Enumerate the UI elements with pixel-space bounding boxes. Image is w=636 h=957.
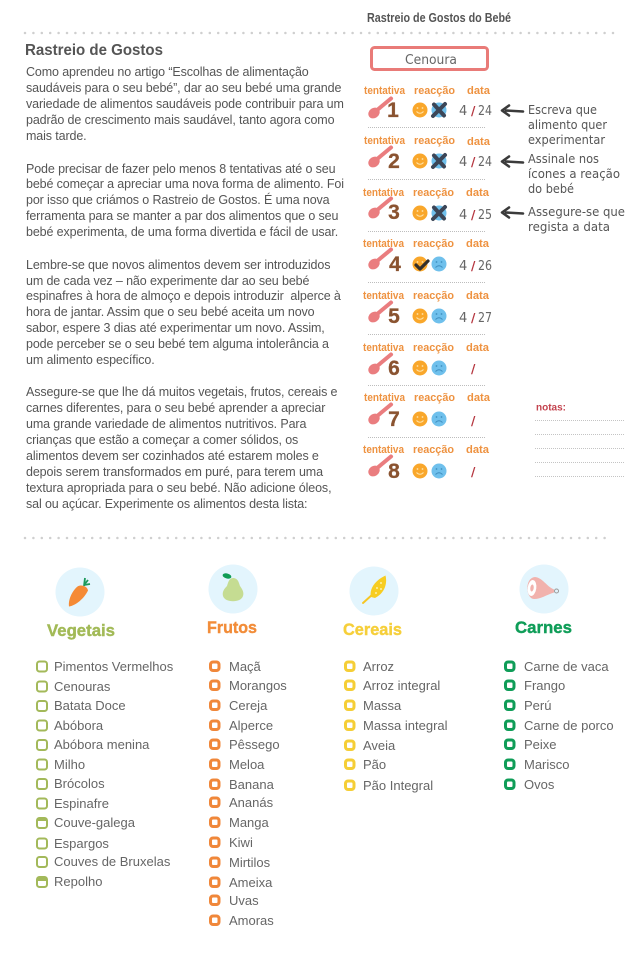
checklist: Carnes: Carne de vaca	[524, 659, 609, 674]
checklist: Frutos	[210, 659, 287, 928]
row 1: data	[467, 85, 491, 97]
checklist: Carnes: Marisco	[524, 757, 570, 772]
heading: Frutos: Frutos	[207, 618, 257, 637]
row 2	[364, 135, 492, 173]
annotation: write the food: alimento quer	[528, 118, 607, 132]
panel: Carnes	[506, 564, 614, 792]
heading: Cereais: Cereais	[343, 620, 402, 639]
row 7: data	[467, 392, 491, 404]
heading: Vegetais: Vegetais	[47, 621, 115, 640]
text block: paragraph 4: crianças que estão a começar a comer sólidos, os	[26, 433, 298, 447]
text block: paragraph 2	[26, 162, 344, 239]
checklist: Frutos: Ameixa	[229, 875, 273, 890]
panel: Vegetais	[37, 568, 174, 889]
checklist: Cereais	[346, 659, 448, 793]
checklist: Carnes: Frango	[524, 678, 565, 693]
row 5: tentativa	[363, 290, 405, 302]
text block: paragraph 1: Como aprendeu no artigo “Escolhas de alimentação	[26, 65, 309, 79]
text block: paragraph 4: depois serem transformados em puré, para terem uma	[26, 465, 323, 479]
checklist: Carnes: Carne de porco	[524, 718, 614, 733]
row 2: reacção	[414, 135, 455, 147]
checklist: Carnes: Peixe	[524, 737, 557, 752]
row 2: 24	[478, 155, 492, 170]
checklist: Vegetais: Batata Doce	[54, 698, 126, 713]
checklist: Cereais: Arroz	[363, 659, 394, 674]
checklist: Vegetais	[37, 659, 174, 889]
checklist: Frutos: Morangos	[229, 678, 287, 693]
text block: paragraph 3: Lembre-se que novos alimentos devem ser introduzidos	[26, 258, 330, 272]
notes: notas:	[536, 402, 566, 414]
row 6: 6	[388, 357, 400, 380]
row 4: 4	[459, 259, 467, 274]
row 3: 3	[388, 201, 400, 224]
checklist: Frutos: Pêssego	[229, 737, 280, 752]
row 1: /	[471, 104, 476, 118]
checklist: Frutos: Maçã	[229, 659, 262, 674]
row 1: 1	[387, 99, 399, 122]
checklist: Vegetais: Abóbora	[54, 718, 104, 733]
row 1	[364, 85, 492, 122]
row 6: /	[471, 362, 476, 376]
text block: paragraph 3: hora de jantar. Assim que o seu bebé aceita um novo	[26, 305, 315, 319]
checklist: Cereais: Aveia	[363, 738, 396, 753]
annotation: mark the reaction: Assinale nos	[528, 152, 599, 166]
checklist: Vegetais: Repolho	[54, 874, 102, 889]
row 8	[363, 444, 490, 483]
text block: paragraph 4: uma grande variedade de alimentos nutritivos. Para	[26, 417, 306, 431]
panel: food name box: Cenoura	[405, 53, 457, 68]
checklist: Frutos: Uvas	[229, 893, 259, 908]
annotation: write the food: experimentar	[528, 133, 605, 147]
text block: paragraph 4: textura apropriada para o seu bebé. Não adicione óleos,	[26, 481, 331, 495]
checklist: Frutos: Banana	[229, 777, 275, 792]
row 2: tentativa	[364, 135, 406, 147]
text block: paragraph 3: espinafres à hora de almoço e depois introduzir alperce à	[26, 289, 341, 303]
row 7: reacção	[414, 392, 455, 404]
checklist: Vegetais: Milho	[54, 757, 85, 772]
text block: paragraph 3: um de cada vez – não experimente dar ao seu bebé	[26, 274, 309, 288]
row 4: /	[471, 259, 476, 273]
row 4: data	[466, 238, 490, 250]
text block: paragraph 2: Pode precisar de fazer pelo menos 8 tentativas até o seu	[26, 162, 336, 176]
row 1: 24	[478, 104, 492, 119]
text block: paragraph 3: sabor, espere 3 dias até experimentar um novo. Assim,	[26, 321, 325, 335]
text block: paragraph 1: mais tarde.	[26, 129, 87, 143]
checklist: Vegetais: Abóbora menina	[54, 737, 150, 752]
row 4: reacção	[413, 238, 454, 250]
row 1: 4	[459, 104, 467, 119]
row 8: reacção	[413, 444, 454, 456]
text block: paragraph 2: bebé começar a apreciar uma nova forma de alimento. Foi	[26, 177, 344, 191]
text block: paragraph 4: alimentos devem ser cozinhados até estarem moles e	[26, 449, 319, 463]
checklist: Vegetais: Espinafre	[54, 796, 109, 811]
checklist: Cereais: Arroz integral	[363, 678, 440, 693]
row 7: tentativa	[364, 392, 406, 404]
heading: Carnes: Carnes	[515, 618, 572, 637]
checklist: Frutos: Mirtilos	[229, 855, 271, 870]
row 4: tentativa	[363, 238, 405, 250]
row 5: 5	[388, 305, 400, 328]
arrow: record the date	[502, 208, 523, 218]
text block: paragraph 1: padrão de crescimento mais saudável, tanto agora como	[26, 113, 335, 127]
row 3	[363, 187, 492, 224]
annotation: write the food: Escreva que	[528, 103, 597, 117]
checklist: Frutos: Kiwi	[229, 835, 253, 850]
text block: paragraph 4: sal ou açúcar. Experimente os alimentos desta lista:	[26, 497, 307, 511]
row 7: /	[471, 414, 476, 428]
arrow: mark the reaction	[502, 156, 523, 166]
icon: carrot	[56, 568, 104, 616]
row 8: data	[466, 444, 490, 456]
checklist: Frutos: Cereja	[229, 698, 268, 713]
text block: paragraph 2: por isso que criámos o Rastreio de Gostos. É uma nova	[26, 192, 330, 207]
checklist: Carnes	[506, 659, 614, 792]
text block: paragraph 1: saudáveis para o seu bebé”, dar ao seu bebé uma grande	[26, 81, 341, 95]
text block: paragraph 4: carnes diferentes, para o seu bebé aprender a apreciar	[26, 401, 325, 415]
panel: food name box	[372, 48, 488, 70]
panel: tracker rows	[363, 85, 492, 483]
panel: introduction text	[25, 42, 344, 511]
row 2: data	[467, 136, 491, 148]
checklist: Frutos: Manga	[229, 815, 270, 830]
text block: paragraph 1: variedade de alimentos saudáveis pode contribuir para um	[26, 97, 344, 111]
row 7	[364, 392, 491, 431]
text block: paragraph 3: um alimento específico.	[26, 353, 155, 367]
checklist: Carnes: Perú	[524, 698, 551, 713]
text block: paragraph 4	[26, 385, 338, 511]
icon: wheat	[350, 566, 398, 616]
checklist: Cereais: Massa	[363, 698, 402, 713]
annotation: write the food	[528, 103, 607, 147]
row 3: data	[466, 187, 490, 199]
row 6: reacção	[413, 342, 454, 354]
row 2: 2	[388, 150, 400, 173]
row 4	[363, 238, 492, 276]
arrow: write the food	[502, 106, 523, 116]
text block: paragraph 1	[26, 65, 344, 143]
row 2: /	[471, 155, 476, 169]
row 4: 26	[478, 259, 492, 274]
checklist: Vegetais: Couves de Bruxelas	[54, 854, 171, 869]
checklist: Frutos: Ananás	[229, 795, 274, 810]
annotation: mark the reaction: do bebé	[528, 182, 574, 196]
row 5: 4	[459, 311, 467, 326]
text block: paragraph 3: pode perceber se o seu bebé tem alguma intolerância a	[26, 337, 329, 351]
checklist: Vegetais: Cenouras	[54, 679, 111, 694]
row 5	[363, 290, 492, 328]
icon: ham	[520, 564, 568, 614]
checklist: Cereais: Pão	[363, 757, 386, 772]
row 4: 4	[389, 253, 401, 276]
row 6	[363, 342, 490, 380]
checklist: Cereais: Massa integral	[363, 718, 448, 733]
text block: paragraph 2: ferramenta para se manter a par dos alimentos que o seu	[26, 209, 338, 223]
row 6: tentativa	[363, 342, 405, 354]
annotation: mark the reaction: ícones a reação	[528, 167, 620, 181]
row 3: /	[471, 208, 476, 222]
text block: paragraph 2: bebé experimenta, de uma forma divertida e fácil de usar.	[26, 225, 338, 239]
row 8: 8	[388, 460, 400, 483]
page title: Rastreio de Gostos do Bebé	[367, 10, 511, 25]
row 3: 25	[478, 208, 492, 223]
annotation: record the date: regista a data	[528, 220, 610, 234]
checklist: Frutos: Amoras	[229, 913, 274, 928]
row 1: reacção	[414, 85, 455, 97]
icon: pear	[208, 564, 258, 614]
row 5: 27	[478, 311, 492, 326]
row 5: data	[466, 290, 490, 302]
row 7: 7	[388, 408, 400, 431]
panel: Cereais	[343, 566, 448, 793]
checklist: Frutos: Meloa	[229, 757, 265, 772]
row 3: reacção	[413, 187, 454, 199]
annotation: record the date: Assegure-se que	[528, 205, 625, 219]
row 5: reacção	[413, 290, 454, 302]
annotation: record the date	[528, 205, 625, 234]
row 5: /	[471, 311, 476, 325]
row 8: /	[471, 465, 476, 479]
notes	[535, 402, 625, 476]
checklist: Carnes: Ovos	[524, 777, 555, 792]
checklist: Vegetais: Pimentos Vermelhos	[54, 659, 174, 674]
row 3: tentativa	[363, 187, 405, 199]
checklist: Vegetais: Espargos	[54, 836, 109, 851]
row 8: tentativa	[363, 444, 405, 456]
checklist: Vegetais: Couve-galega	[54, 815, 136, 830]
panel: Frutos	[207, 564, 287, 928]
annotation: mark the reaction	[528, 152, 620, 196]
row 2: 4	[459, 155, 467, 170]
checklist: Vegetais: Brócolos	[54, 776, 105, 791]
checklist: Cereais: Pão Integral	[363, 778, 433, 793]
row 3: 4	[459, 208, 467, 223]
row 1: tentativa	[364, 85, 406, 97]
text block: paragraph 3	[26, 258, 341, 367]
text block: paragraph 4: Assegure-se que lhe dá muitos vegetais, frutos, cereais e	[26, 385, 338, 399]
row 6: data	[466, 342, 490, 354]
heading: Rastreio de Gostos: Rastreio de Gostos	[25, 42, 163, 59]
checklist: Frutos: Alperce	[229, 718, 273, 733]
